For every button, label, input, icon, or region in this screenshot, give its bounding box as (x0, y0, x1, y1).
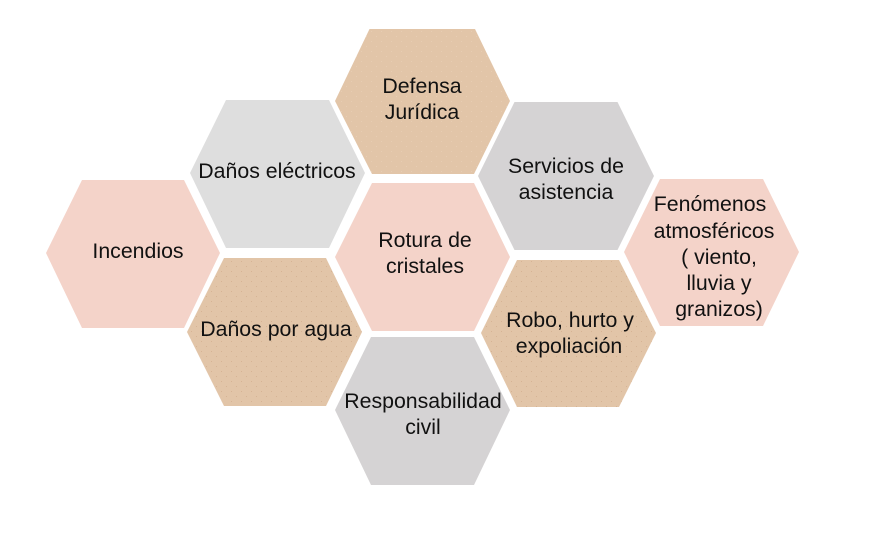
hexagon: Incendios (46, 180, 220, 328)
hexagon: Daños por agua: Daños por agua (200, 317, 352, 341)
hexagon: Servicios de asistencia (478, 102, 654, 250)
hexagon: Defensa Jurídica: Defensa (382, 74, 462, 98)
hexagon: Responsabilidad civil: civil (405, 415, 441, 439)
hexagon: Fenómenos atmosféricos: granizos) (675, 297, 763, 321)
hexagon: Robo, hurto y expoliación: expoliación (516, 334, 622, 358)
hexagon: Fenómenos atmosféricos: lluvia y (686, 271, 752, 295)
hexagon: Robo, hurto y expoliación (481, 260, 656, 407)
hexagon: Fenómenos atmosféricos: Fenómenos (654, 192, 766, 216)
hexagon: Servicios de asistencia: asistencia (519, 180, 614, 204)
hexagon: Daños por agua (187, 258, 362, 406)
hexagon: Responsabilidad civil: Responsabilidad (344, 389, 502, 413)
hexagon: Incendios: Incendios (92, 239, 184, 263)
hexagon: Defensa Jurídica: Jurídica (385, 100, 459, 124)
hexagon: Fenómenos atmosféricos: ( viento, (681, 245, 757, 269)
hexagon: Rotura de cristales: cristales (386, 254, 464, 278)
hexagon: Defensa Jurídica (335, 29, 510, 174)
hexagon: Rotura de cristales (335, 183, 510, 331)
hexagon: Responsabilidad civil (335, 337, 510, 485)
hexagon: Fenómenos atmosféricos (624, 179, 799, 326)
hexagon: Robo, hurto y expoliación: Robo, hurto y (506, 308, 634, 332)
hexagon: Daños eléctricos: Daños eléctricos (198, 159, 356, 183)
hexagon: Fenómenos atmosféricos: atmosféricos (654, 219, 774, 243)
hexagon: Rotura de cristales: Rotura de (378, 228, 472, 252)
hexagon: Servicios de asistencia: Servicios de (508, 154, 624, 178)
hexagon: Daños eléctricos (190, 100, 365, 248)
